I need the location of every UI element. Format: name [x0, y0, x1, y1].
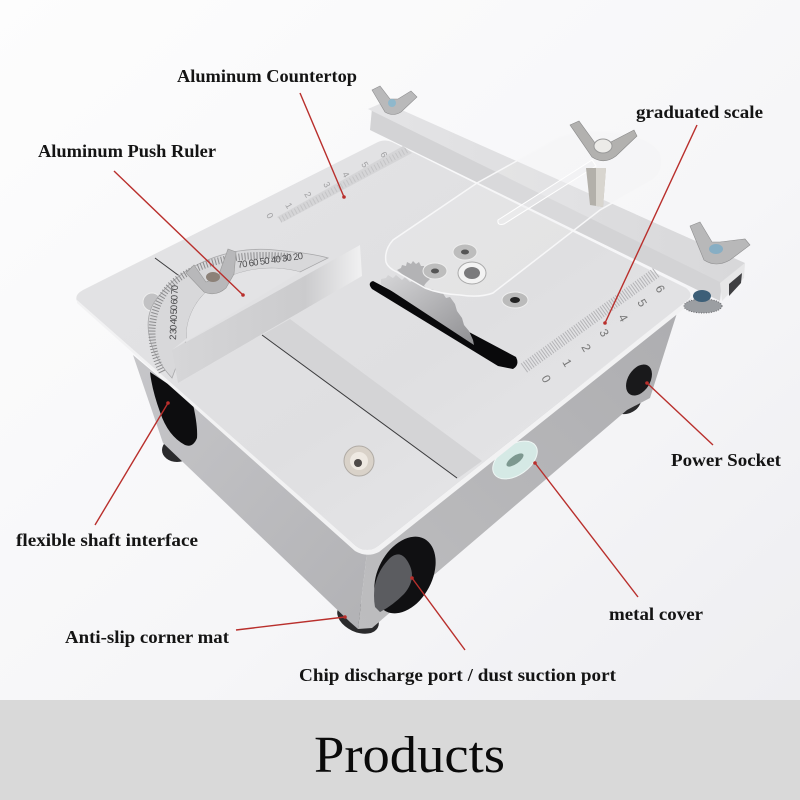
callout: flexible shaft interface: flexible shaft interface: [16, 530, 198, 550]
left scale on countertop: 6: [378, 150, 389, 159]
wing nut: left: [372, 86, 417, 114]
callout: flexible shaft interface: [16, 401, 198, 550]
footer title: Products: [314, 727, 505, 784]
saw table product illustration: [76, 86, 750, 640]
saw blade: [381, 275, 474, 345]
protractor interior disc: [172, 268, 300, 350]
callout: Anti-slip corner mat: [65, 615, 347, 647]
callout: Chip discharge port / dust suction port: Chip discharge port / dust suction port: [299, 665, 616, 685]
callout: Aluminum Push Ruler: Aluminum Push Ruler: [38, 141, 216, 161]
protractor: [148, 249, 328, 378]
miter groove lines: [155, 258, 457, 478]
table screws: [423, 244, 528, 308]
flexible shaft opening: [150, 372, 197, 446]
callout: graduated scale: graduated scale: [636, 102, 763, 122]
left scale on countertop: 3: [321, 180, 332, 189]
front bevel of countertop: [77, 300, 690, 555]
left scale on countertop: 0: [264, 211, 275, 220]
power socket: [621, 360, 657, 400]
miter groove strip: [262, 319, 482, 479]
hex standoff: [586, 168, 606, 207]
callout: Power Socket: [645, 381, 781, 470]
knurled knob: [684, 290, 722, 313]
through-guard blade teeth: [397, 261, 430, 287]
callout: Aluminum Push Ruler: [38, 141, 245, 297]
callout: Chip discharge port / dust suction port: [299, 576, 616, 685]
fence face: [172, 245, 362, 383]
right graduated scale: 3: [596, 326, 612, 340]
right graduated scale: 5: [634, 296, 650, 310]
right side face: [358, 298, 692, 629]
left scale on countertop: 4: [340, 170, 351, 179]
right graduated scale: [524, 272, 668, 386]
rear fence bar: [368, 102, 745, 301]
callout: Power Socket: Power Socket: [671, 450, 781, 470]
callout: Aluminum Countertop: [177, 66, 357, 199]
front screw: [344, 446, 374, 476]
plate hole: [143, 293, 161, 311]
left side face: [133, 355, 367, 629]
acrylic blade guard: [386, 132, 662, 296]
left scale on countertop: 2: [302, 190, 313, 199]
callout: metal cover: metal cover: [609, 604, 703, 624]
callout: Anti-slip corner mat: Anti-slip corner mat: [65, 627, 229, 647]
aluminum countertop: [76, 140, 691, 550]
rubber feet: [162, 387, 645, 640]
right graduated scale: 2: [578, 342, 594, 355]
chip discharge port: [362, 526, 448, 624]
protractor: 70 60 50 40 30 20: [237, 251, 304, 271]
left scale on countertop: 1: [283, 201, 294, 210]
callout: graduated scale: [603, 102, 763, 325]
saw slot: [370, 281, 517, 369]
callout: metal cover: [533, 461, 703, 624]
protractor pivot wing nut: [186, 249, 236, 294]
aluminum push ruler: [148, 245, 362, 383]
wing nut: right: [690, 222, 750, 264]
left scale on countertop: 5: [359, 160, 370, 169]
protractor: 2 30 40 50 60 70: [168, 285, 181, 340]
guard slot: [498, 160, 596, 224]
right graduated scale: 1: [559, 356, 575, 370]
right graduated scale: 6: [652, 282, 668, 296]
left scale on countertop: [264, 146, 412, 222]
callout: Aluminum Countertop: Aluminum Countertop: [177, 66, 357, 86]
wing nut: center: [570, 121, 637, 161]
certification sticker: [486, 433, 544, 487]
right graduated scale: 4: [615, 312, 631, 325]
footer band: [0, 700, 800, 800]
right graduated scale: 0: [538, 372, 554, 386]
